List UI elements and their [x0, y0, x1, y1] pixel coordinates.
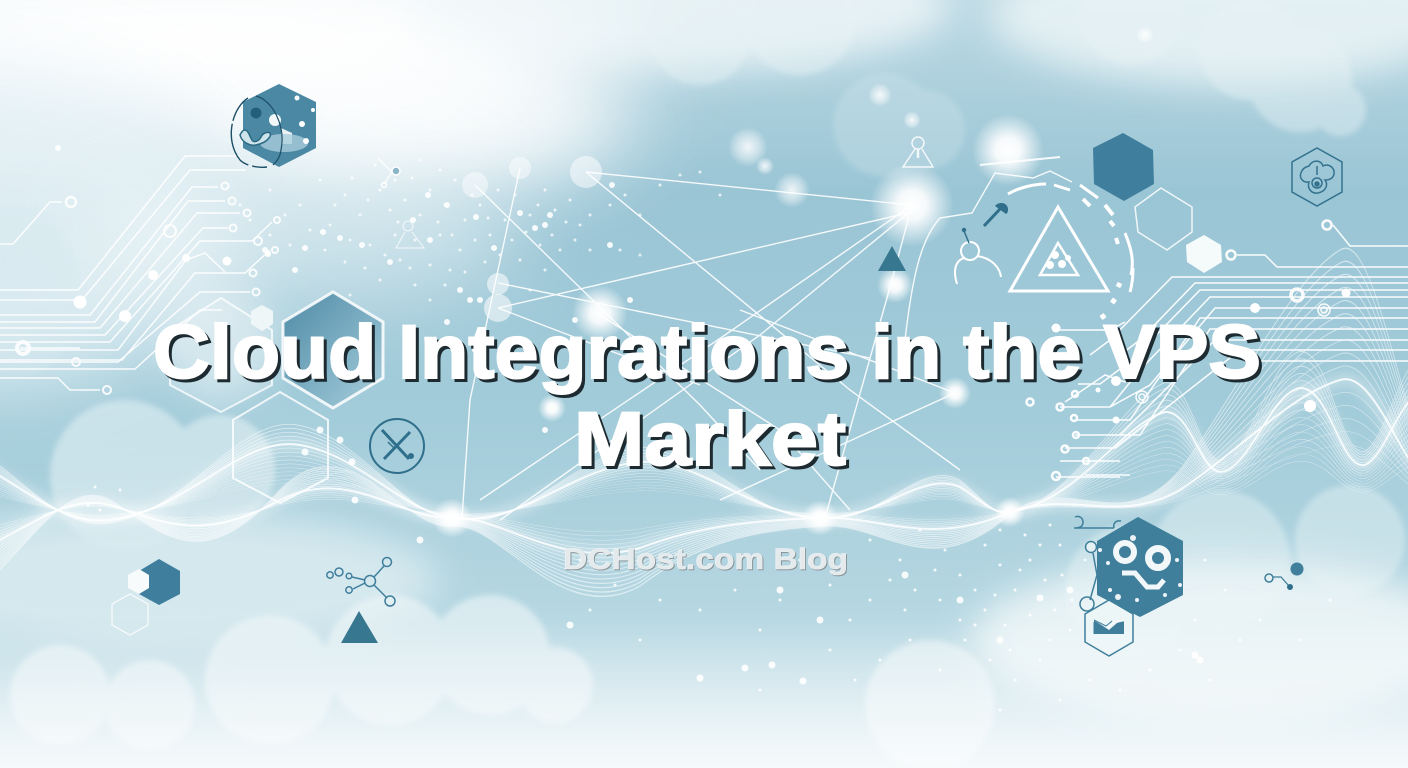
particles — [58, 148, 1330, 710]
icon: person outline triangle — [903, 137, 933, 167]
hexagon: small white — [251, 305, 273, 331]
circuit nodes: right — [1052, 288, 1350, 424]
subtitle: DCHost.com Blog — [563, 543, 848, 576]
hexagon: outline top right — [1135, 188, 1192, 250]
hexagon: solid teal top right — [1093, 133, 1154, 201]
icon: small link bottom right — [1265, 562, 1304, 590]
icon: faint person — [396, 221, 424, 248]
title: Cloud Integrations in the VPS — [153, 310, 1261, 395]
hexagon: lower outline — [233, 392, 328, 503]
hexagon: large teal — [283, 292, 383, 408]
hexagon: white right — [1186, 235, 1222, 273]
hexagon: textured teal with people icon — [231, 84, 316, 167]
circuit traces: left — [0, 156, 280, 394]
wave ribbon: fine strands — [0, 248, 1408, 596]
icon: small hexagon cluster bottom left — [112, 559, 180, 635]
network: glowing nodes — [432, 26, 1154, 538]
icon: gear flower hexagon — [1292, 148, 1342, 206]
hexagon: outline beside title — [170, 298, 272, 412]
triangle: teal near hub — [878, 246, 906, 271]
circuit traces: right — [1026, 220, 1408, 480]
network: connection lines — [462, 157, 1072, 520]
icon: faint link top — [378, 158, 400, 188]
icon: gears hexagon — [1074, 516, 1183, 617]
wave ribbon: bright strands — [0, 379, 1408, 553]
title — [153, 310, 1261, 482]
icon: network nodes bottom left — [327, 558, 395, 606]
icon: crown chart hexagon — [1085, 600, 1133, 656]
circuit nodes: left — [74, 251, 271, 322]
icon: hammer — [984, 203, 1008, 226]
icon: hazard triangle with dashed ring — [1008, 184, 1133, 318]
title: Market — [574, 397, 846, 482]
triangle: teal bottom left — [341, 611, 378, 643]
icon: crossed tools in circle — [370, 419, 424, 473]
icon: person node — [955, 228, 1001, 284]
